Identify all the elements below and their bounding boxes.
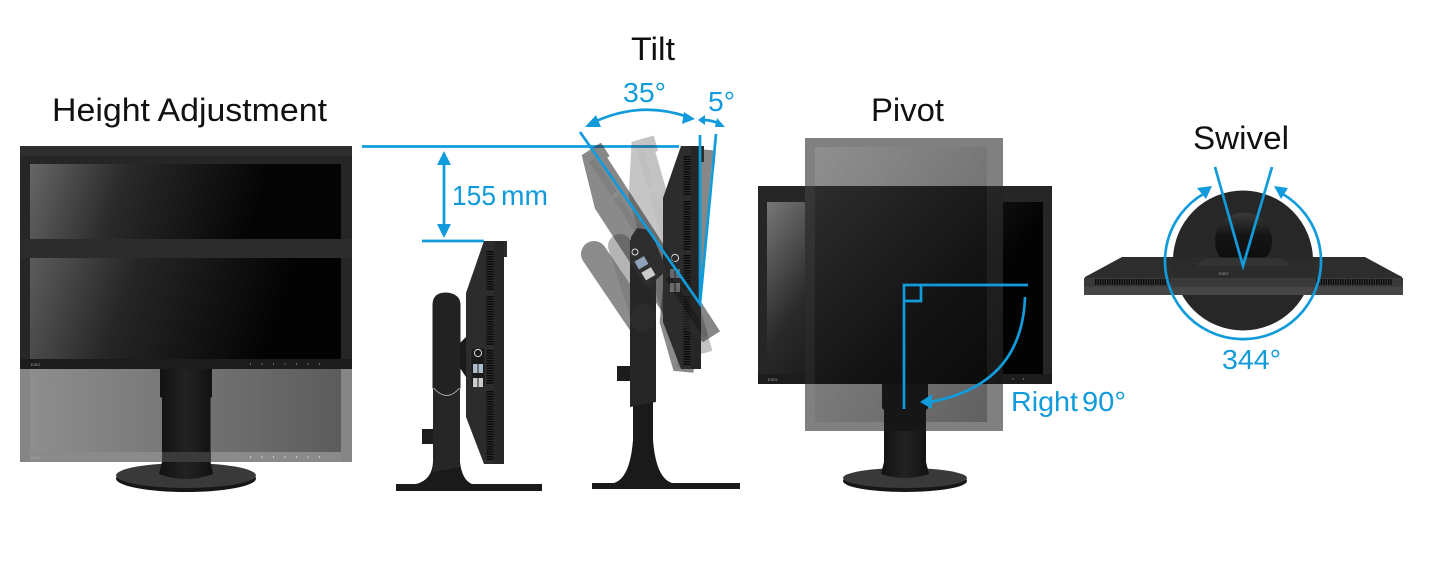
landscape monitor [758, 186, 1052, 384]
stand base [116, 463, 256, 492]
clip [617, 366, 630, 381]
ghost lowered monitor [20, 369, 352, 462]
title: Pivot: Pivot [871, 92, 944, 128]
stand column [159, 369, 213, 479]
front monitor: height adjustment [20, 146, 352, 492]
base [843, 468, 967, 492]
tilt view monitor [567, 136, 740, 489]
landscape monitor: EIZO [768, 377, 777, 382]
arm [433, 293, 460, 397]
pivot guide lines: Right [1011, 386, 1078, 417]
swivel top view monitor [1084, 190, 1403, 330]
port panel [471, 348, 485, 387]
dimension: 155 mm [362, 146, 679, 241]
title: Height Adjustment: Height Adjustment [52, 92, 327, 128]
ghost: mid tilt [614, 136, 715, 361]
stand ball [1215, 213, 1272, 258]
ghost: back tilt [567, 143, 722, 352]
arm end [630, 304, 656, 332]
title: Swivel: Swivel [1193, 120, 1289, 156]
rotated port panel [630, 228, 667, 287]
title: Tilt: Tilt [631, 31, 675, 67]
ghost: forward tilt [656, 147, 716, 373]
base and column [396, 385, 542, 491]
tilt angle lines and arcs: 35° [623, 77, 666, 108]
hinge [460, 337, 466, 377]
raised monitor: EIZO [31, 362, 40, 367]
dimension: 155 mm: 155 [452, 180, 496, 211]
side view monitor [396, 241, 542, 491]
swivel range arcs and label: 344° [1222, 344, 1281, 375]
ghost portrait monitor [805, 138, 1003, 431]
tilt angle lines and arcs: 5° [708, 86, 735, 117]
overlap of ghost and monitor [805, 186, 1003, 384]
pivot guide lines [904, 285, 1126, 417]
swivel range arcs and label [1165, 167, 1321, 375]
ghost arms [594, 246, 643, 322]
base circle [1173, 190, 1313, 330]
ghost lowered monitor: EIZO [31, 455, 40, 460]
monitor body [1084, 257, 1402, 295]
clip [422, 429, 433, 444]
neck plate [1198, 258, 1288, 266]
base and column [592, 395, 740, 489]
raised monitor [20, 146, 352, 369]
dimension: 155 mm: mm [501, 180, 548, 211]
logo: EIZO [1219, 271, 1228, 276]
pivot monitor [758, 138, 1052, 492]
stand over ghost [882, 384, 928, 431]
stand [881, 384, 929, 478]
pivot guide lines: 90° [1082, 386, 1126, 417]
tilt angle lines and arcs [580, 77, 735, 304]
